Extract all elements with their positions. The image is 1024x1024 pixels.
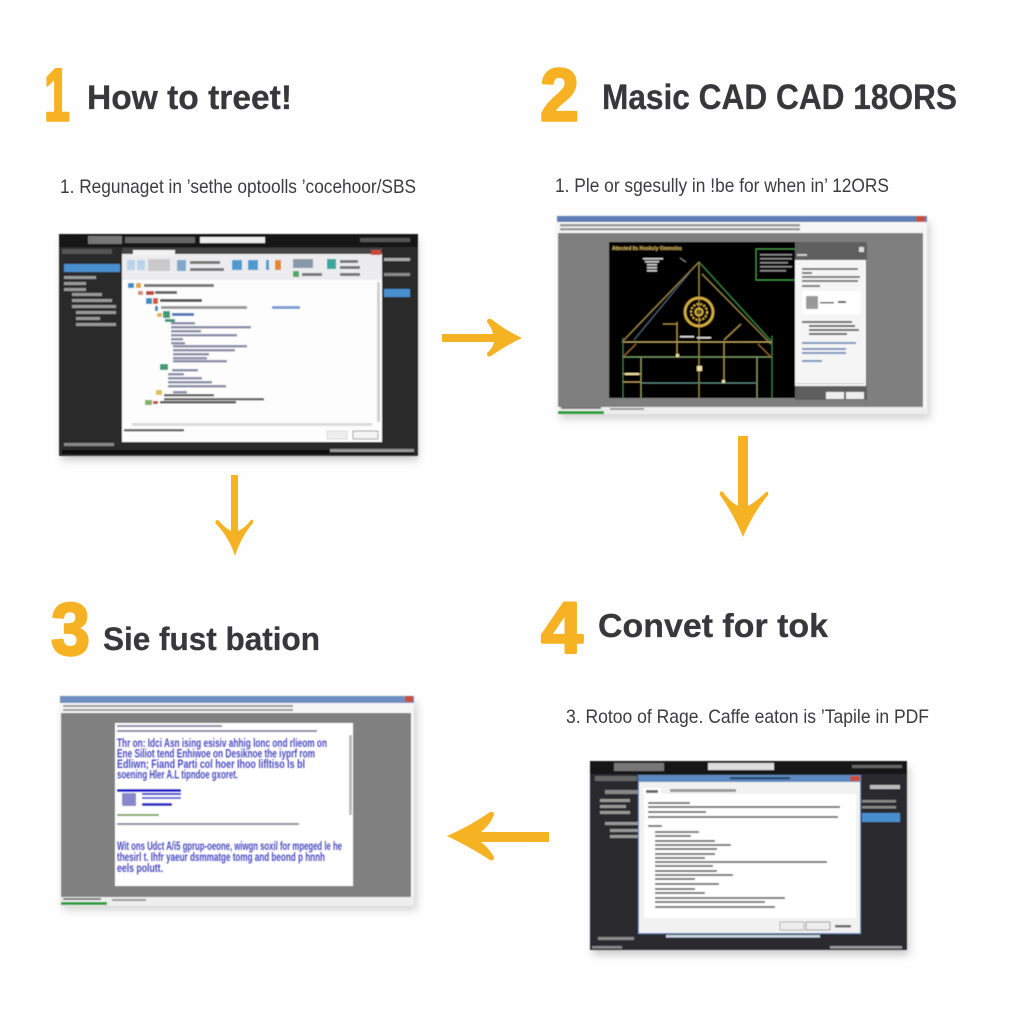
step 3 screenshot: document with blue text [60,696,417,910]
step 2 screenshot: roof drawing in CAD [557,216,930,419]
arrow: step 4 to step 3 [447,812,549,861]
blue body text: soening Hler A.L tipndoe gxoret. [117,768,238,782]
step 3 heading [51,588,320,670]
arrow: step 2 to step 4 [720,436,768,537]
blue body text: Ene Siliot tend Enhiwoe on Desiknoe the iyprf rom [117,746,315,760]
step 4 heading: 4 [541,588,583,668]
step 1 screenshot: dark app with tree dialog [59,234,418,460]
step 2 heading: 2 [540,54,579,136]
step 2 screenshot: roof drawing in CAD: Attested Its Hooksly Ommoins [612,246,682,252]
step 4 heading: Convet for tok [598,607,829,644]
arrow: step 1 to step 2 [442,319,522,357]
step 4 screenshot: dark app with text dialog [590,761,909,955]
blue body text: thesirl t. Ihfr yaeur dsmmatge tomg and beond p hnnh [117,850,325,864]
blue body text: Edliwn; Fiand Parti col hoer Ihoo lifltiso Is bl [117,757,305,771]
step 2 description: 1. Ple or sgesully in !be for when in’ 12ORS [555,175,889,197]
blue body text [117,736,342,875]
step 4 heading [541,588,829,668]
step 1 heading [44,54,292,136]
step 3 heading: Sie fust bation [103,621,320,657]
step 2 heading [540,54,957,136]
step 1 description: 1. Regunaget in ’sethe optoolls ’cocehoor/SBS [60,176,416,198]
blue body text: eels polutt. [117,861,163,875]
blue body text: Wit ons Udct A/i5 gprup-oeone, wiwgn soxil for mpeged le he [117,839,342,853]
step 3 heading: 3 [51,588,90,670]
blue body text: Thr on: Idci Asn ising esisiv ahhig lonc ond rlieom on [117,736,327,750]
step 2 heading: Masic CAD CAD 18ORS [602,78,957,117]
step 1 heading: 1 [44,54,70,136]
arrow: step 1 to step 3 [215,475,253,556]
step 4 description: 3. Rotoo of Rage. Caffe eaton is ’Tapile in PDF [566,706,929,728]
step 1 heading: How to treet! [87,79,292,117]
